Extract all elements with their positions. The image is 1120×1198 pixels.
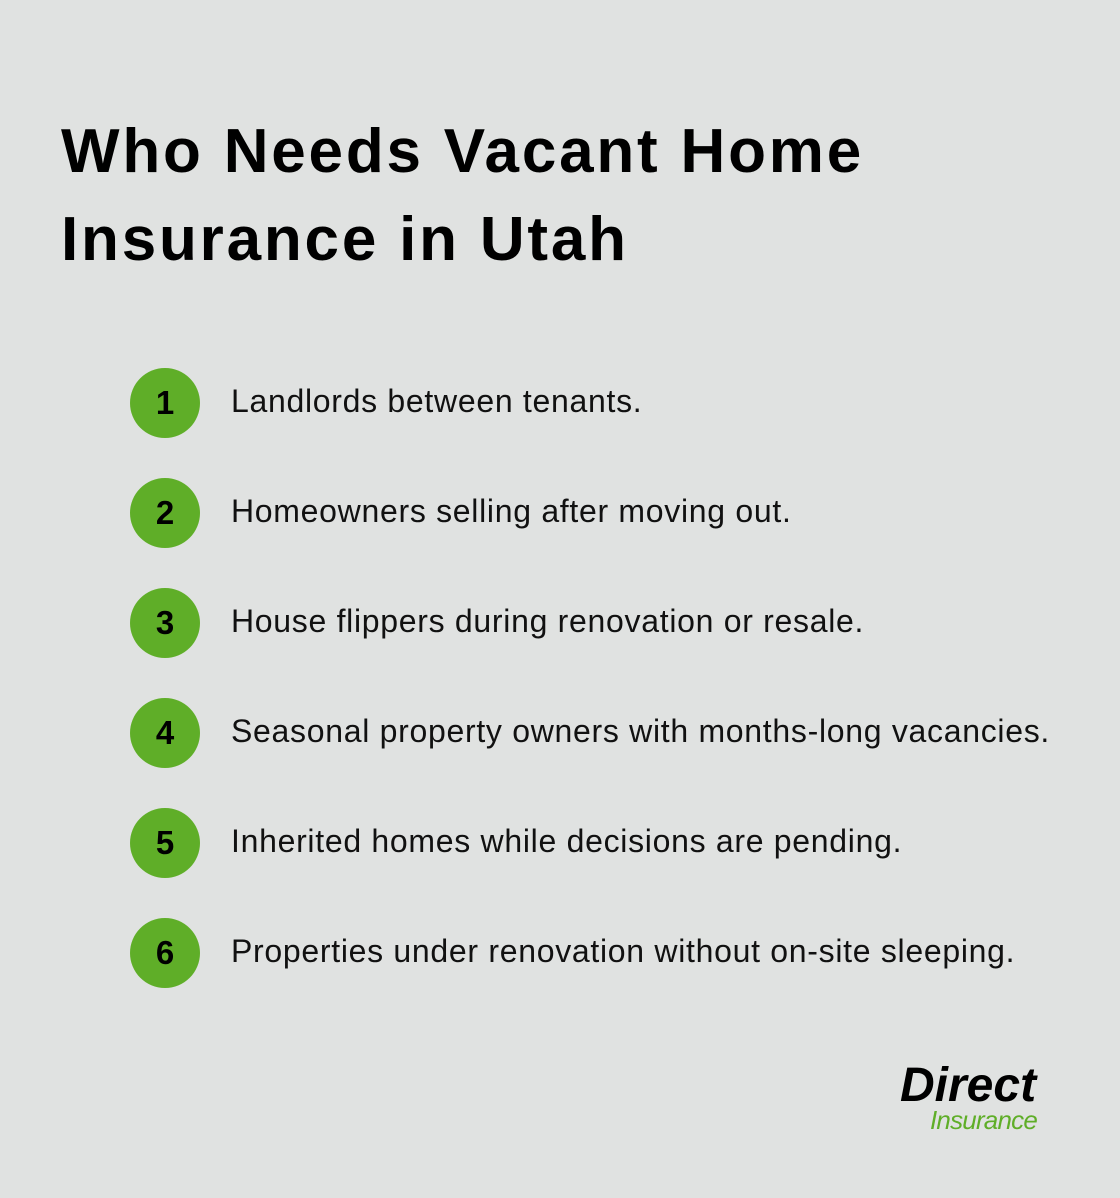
list item 3 bbox=[130, 588, 864, 658]
list item 5: 5 bbox=[156, 824, 174, 861]
list item 2 bbox=[130, 478, 792, 548]
title: Insurance in Utah bbox=[61, 205, 629, 274]
list item 5: Inherited homes while decisions are pending. bbox=[231, 823, 902, 859]
list item 4: 4 bbox=[156, 714, 174, 751]
list item 4 bbox=[130, 698, 1050, 768]
title bbox=[61, 117, 864, 274]
list item 1: Landlords between tenants. bbox=[231, 383, 642, 419]
title: Who Needs Vacant Home bbox=[61, 117, 864, 186]
list item 6: 6 bbox=[156, 934, 174, 971]
list item 4: Seasonal property owners with months-long vacancies. bbox=[231, 713, 1050, 749]
list item 6 bbox=[130, 918, 1015, 988]
list item 6: Properties under renovation without on-site sleeping. bbox=[231, 933, 1015, 969]
logo: Insurance bbox=[930, 1105, 1037, 1135]
logo bbox=[900, 1059, 1038, 1135]
list item 3: House flippers during renovation or resale. bbox=[231, 603, 864, 639]
list item 1 bbox=[130, 368, 642, 438]
logo: Direct bbox=[900, 1059, 1036, 1112]
list item 2: Homeowners selling after moving out. bbox=[231, 493, 792, 529]
list item 1: 1 bbox=[156, 384, 174, 421]
list item 2: 2 bbox=[156, 494, 174, 531]
list item 5 bbox=[130, 808, 902, 878]
list item 3: 3 bbox=[156, 604, 174, 641]
